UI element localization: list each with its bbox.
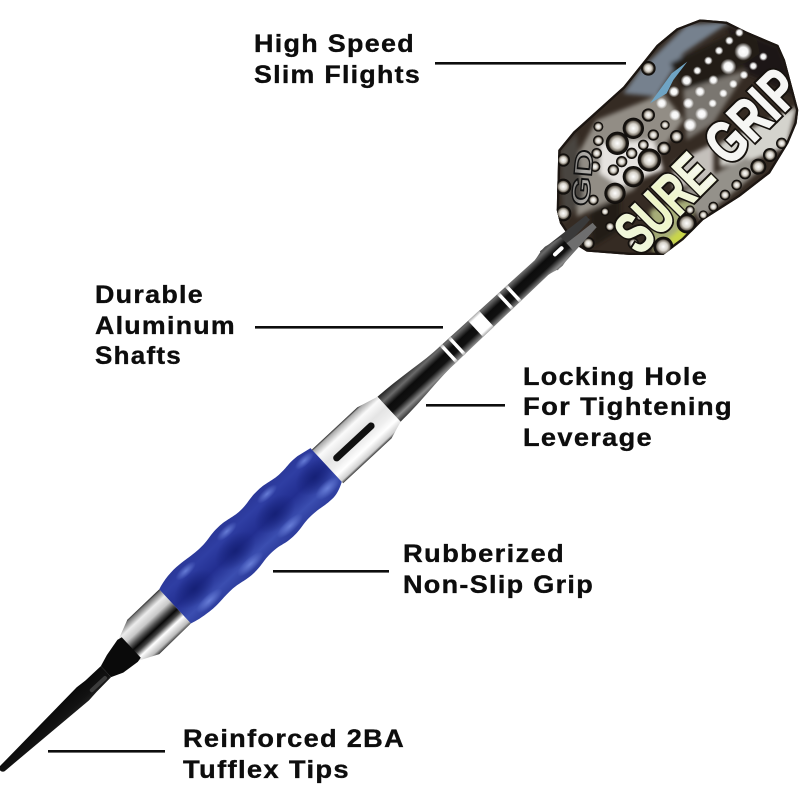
label text: Shafts bbox=[95, 342, 182, 370]
black collar bbox=[95, 636, 141, 682]
leader line bbox=[255, 326, 443, 329]
label text bbox=[95, 281, 236, 370]
front barrel silver bbox=[112, 589, 192, 668]
dart body bbox=[0, 199, 610, 791]
aluminum shaft bbox=[377, 231, 579, 422]
leader line bbox=[273, 570, 389, 573]
label text: Aluminum bbox=[95, 312, 236, 340]
label text: High Speed bbox=[254, 30, 415, 58]
label text: Locking Hole bbox=[523, 363, 708, 391]
flight logo: GD bbox=[567, 148, 600, 207]
leader line bbox=[426, 404, 505, 407]
callout: rubberized grip bbox=[273, 540, 594, 599]
flight brand text bbox=[614, 68, 793, 253]
blue rubber grip bbox=[159, 448, 342, 624]
label text bbox=[183, 725, 405, 784]
label text: Slim Flights bbox=[254, 61, 421, 89]
leader line bbox=[435, 62, 626, 65]
label text bbox=[523, 363, 733, 452]
label text: Tufflex Tips bbox=[183, 756, 350, 784]
flight ringed dots bbox=[555, 61, 787, 257]
callout: high speed slim flights bbox=[254, 30, 626, 89]
dart flight bbox=[556, 19, 798, 255]
label text: Rubberized bbox=[403, 540, 565, 568]
leader line bbox=[48, 750, 165, 753]
locking hole bbox=[332, 421, 376, 463]
rear barrel silver bbox=[312, 392, 405, 483]
label text: Non-Slip Grip bbox=[403, 571, 594, 599]
label text: Durable bbox=[95, 281, 204, 309]
flight glowing dots bbox=[656, 28, 768, 132]
flight brand text: SURE bbox=[603, 142, 726, 266]
reinforced tip bbox=[0, 665, 112, 777]
flight brand text: SURE bbox=[603, 142, 726, 266]
label text: For Tightening bbox=[523, 393, 733, 421]
label text bbox=[254, 30, 421, 89]
callout: durable aluminum shafts bbox=[95, 281, 443, 370]
shaft slot bbox=[552, 245, 564, 257]
shaft prongs bbox=[540, 212, 600, 270]
label text bbox=[403, 540, 594, 599]
flight base print bbox=[556, 19, 798, 255]
callout: locking hole bbox=[426, 363, 733, 452]
callout: tufflex tips bbox=[48, 725, 405, 784]
label text: Reinforced 2BA bbox=[183, 725, 405, 753]
shaft rings bbox=[440, 284, 523, 363]
label text: Leverage bbox=[523, 424, 653, 452]
